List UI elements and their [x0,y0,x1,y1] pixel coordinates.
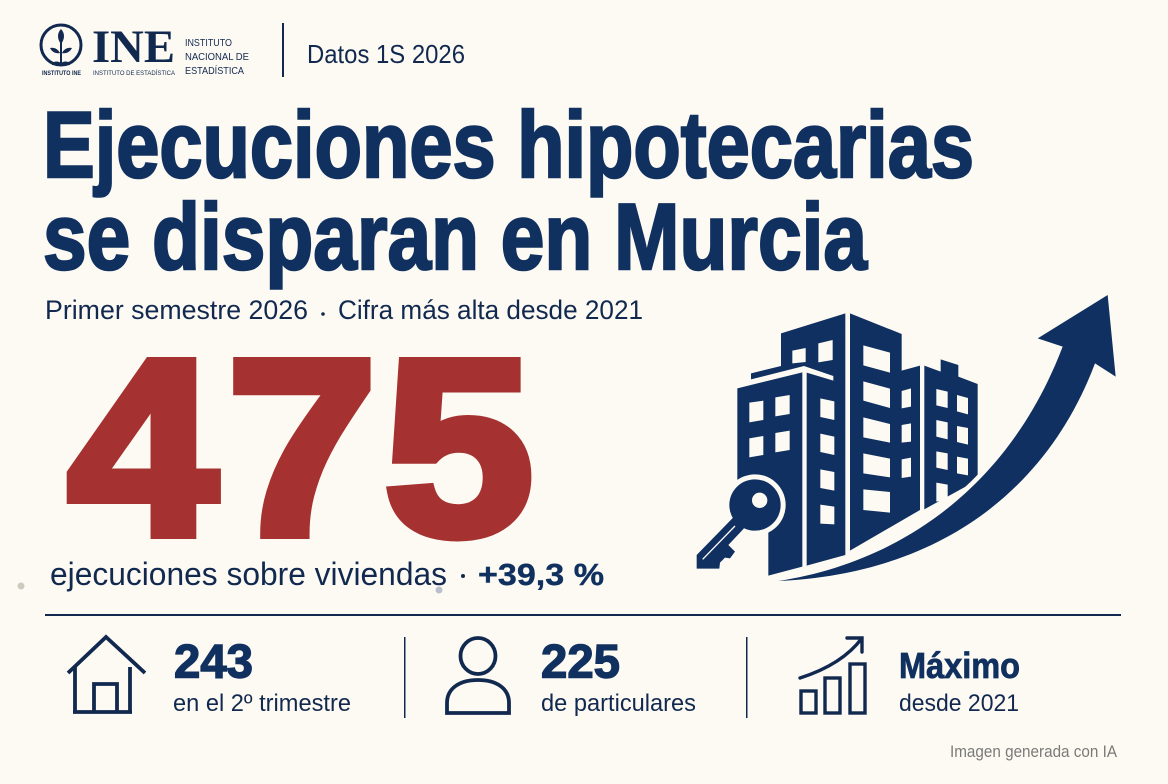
stat: maximum: desde 2021 [899,690,1019,717]
logo institute name: INSTITUTO [185,37,232,49]
stat: 225: de particulares [541,690,696,717]
smudges [18,582,24,590]
AI credit note: Imagen generada con IA [950,743,1117,761]
icon: key [697,474,786,569]
title: se disparan en Murcia [43,184,868,289]
big number 475 [68,308,534,587]
stat: 243: 243 [174,634,253,688]
stats row [68,634,1020,718]
big number 475: 7 [227,308,377,587]
subtitle: Cifra más alta desde 2021 [338,295,643,325]
logo institute name: ESTADÍSTICA [185,64,244,77]
icon: house [68,637,145,712]
subtitle: Primer semestre 2026 [45,295,308,325]
big number 475: 5 [384,308,534,587]
stat: 243: en el 2º trimestre [173,690,351,717]
icon: rising arrow [778,295,1116,581]
header: logo and period [41,21,465,77]
stat: maximum [800,638,1020,717]
big number 475: 4 [68,308,217,587]
icon: rising bar chart [800,638,865,713]
logo wordmark INE: INE [92,21,175,73]
stat: 243 [68,634,351,717]
icon: buildings [737,313,978,576]
title: Ejecuciones hipotecarias [43,92,974,197]
stat: 225 [447,634,696,717]
stat: 225: 225 [541,634,620,688]
icon: INE emblem: INSTITUTO INE [42,71,81,77]
period label: Datos 1S 2026 [307,39,465,69]
stat: maximum: Máximo [899,645,1020,686]
title [43,92,974,289]
big number caption: ejecuciones sobre viviendas [50,556,447,592]
subtitle [45,295,643,325]
icon: INE emblem [41,25,81,77]
logo wordmark INE: INSTITUTO DE ESTADÍSTICA [93,68,176,77]
icon: person [447,638,509,713]
logo institute name: NACIONAL DE [185,51,249,63]
illustration: buildings, key and rising arrow [697,295,1116,581]
logo institute name [185,37,249,77]
big number caption: +39,3 % [478,557,604,592]
